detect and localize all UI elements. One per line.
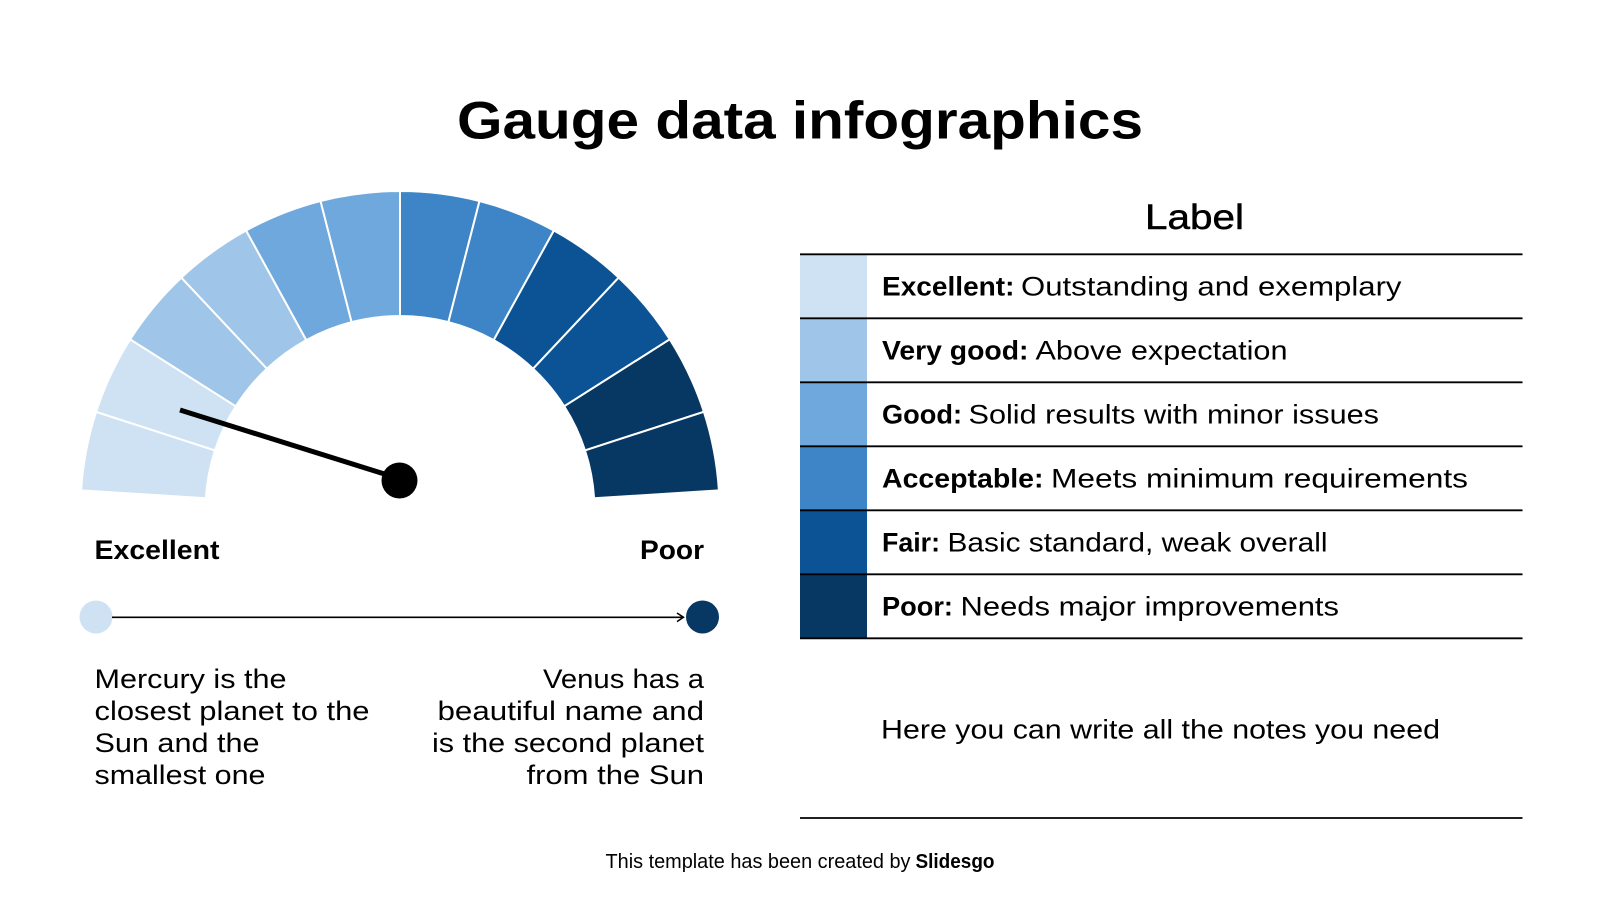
row fair: Basic standard, weak overall xyxy=(948,528,1328,558)
row acceptable xyxy=(882,464,1468,494)
scale label: excellent: Excellent xyxy=(94,535,220,565)
swatch poor xyxy=(800,575,867,639)
legend table xyxy=(800,254,1522,818)
row good: Solid results with minor issues xyxy=(968,400,1379,430)
text: venus: Venus has a xyxy=(543,664,704,694)
text: venus xyxy=(432,664,705,790)
gauge segment 2 excellent xyxy=(96,339,236,450)
text: mercury: Sun and the xyxy=(94,728,260,758)
gauge segment 7 acceptable xyxy=(400,191,480,322)
row good: Good: xyxy=(882,400,962,430)
row excellent: Excellent: xyxy=(882,272,1014,302)
row acceptable: Meets minimum requirements xyxy=(1051,464,1468,494)
footer credit: Slidesgo xyxy=(916,851,994,873)
gauge segment 10 fair xyxy=(533,278,670,406)
gauge segment 5 good xyxy=(246,201,352,340)
gauge needle xyxy=(180,410,418,498)
text: venus: from the Sun xyxy=(526,760,704,790)
row fair: Fair: xyxy=(882,528,940,558)
gauge segment 12 poor xyxy=(585,412,719,498)
gauge segment 1 excellent xyxy=(81,412,215,498)
text: venus: beautiful name and xyxy=(438,696,704,726)
text: mercury: closest planet to the xyxy=(94,696,370,726)
gauge segment 4 very good xyxy=(181,230,306,369)
row acceptable: Acceptable: xyxy=(882,464,1044,494)
title: Gauge data infographics xyxy=(457,92,1143,150)
row poor: Needs major improvements xyxy=(960,592,1339,622)
row excellent xyxy=(882,272,1402,302)
gauge chart xyxy=(81,191,719,498)
notes text: Here you can write all the notes you need xyxy=(881,714,1440,744)
gauge segment 8 acceptable xyxy=(448,201,554,340)
gauge segment 9 fair xyxy=(494,230,619,369)
row very good: Above expectation xyxy=(1036,336,1288,366)
table heading: Label xyxy=(1145,197,1244,237)
scale arrow xyxy=(80,600,719,634)
row very good: Very good: xyxy=(882,336,1028,366)
scale label: poor: Poor xyxy=(640,535,704,565)
swatch fair xyxy=(800,511,867,575)
gauge segment 6 good xyxy=(320,191,400,322)
row very good xyxy=(882,336,1288,366)
text: mercury: smallest one xyxy=(94,760,266,790)
swatch very good xyxy=(800,319,867,383)
row poor: Poor: xyxy=(882,592,953,622)
text: mercury xyxy=(94,664,370,790)
swatch good xyxy=(800,383,867,447)
text: mercury: Mercury is the xyxy=(94,664,286,694)
footer credit: This template has been created by xyxy=(606,851,910,873)
row excellent: Outstanding and exemplary xyxy=(1021,272,1402,302)
gauge segment 11 poor xyxy=(564,339,704,450)
text: venus: is the second planet xyxy=(432,728,705,758)
swatch excellent xyxy=(800,255,867,319)
gauge segment 3 very good xyxy=(130,278,267,406)
swatch acceptable xyxy=(800,447,867,511)
